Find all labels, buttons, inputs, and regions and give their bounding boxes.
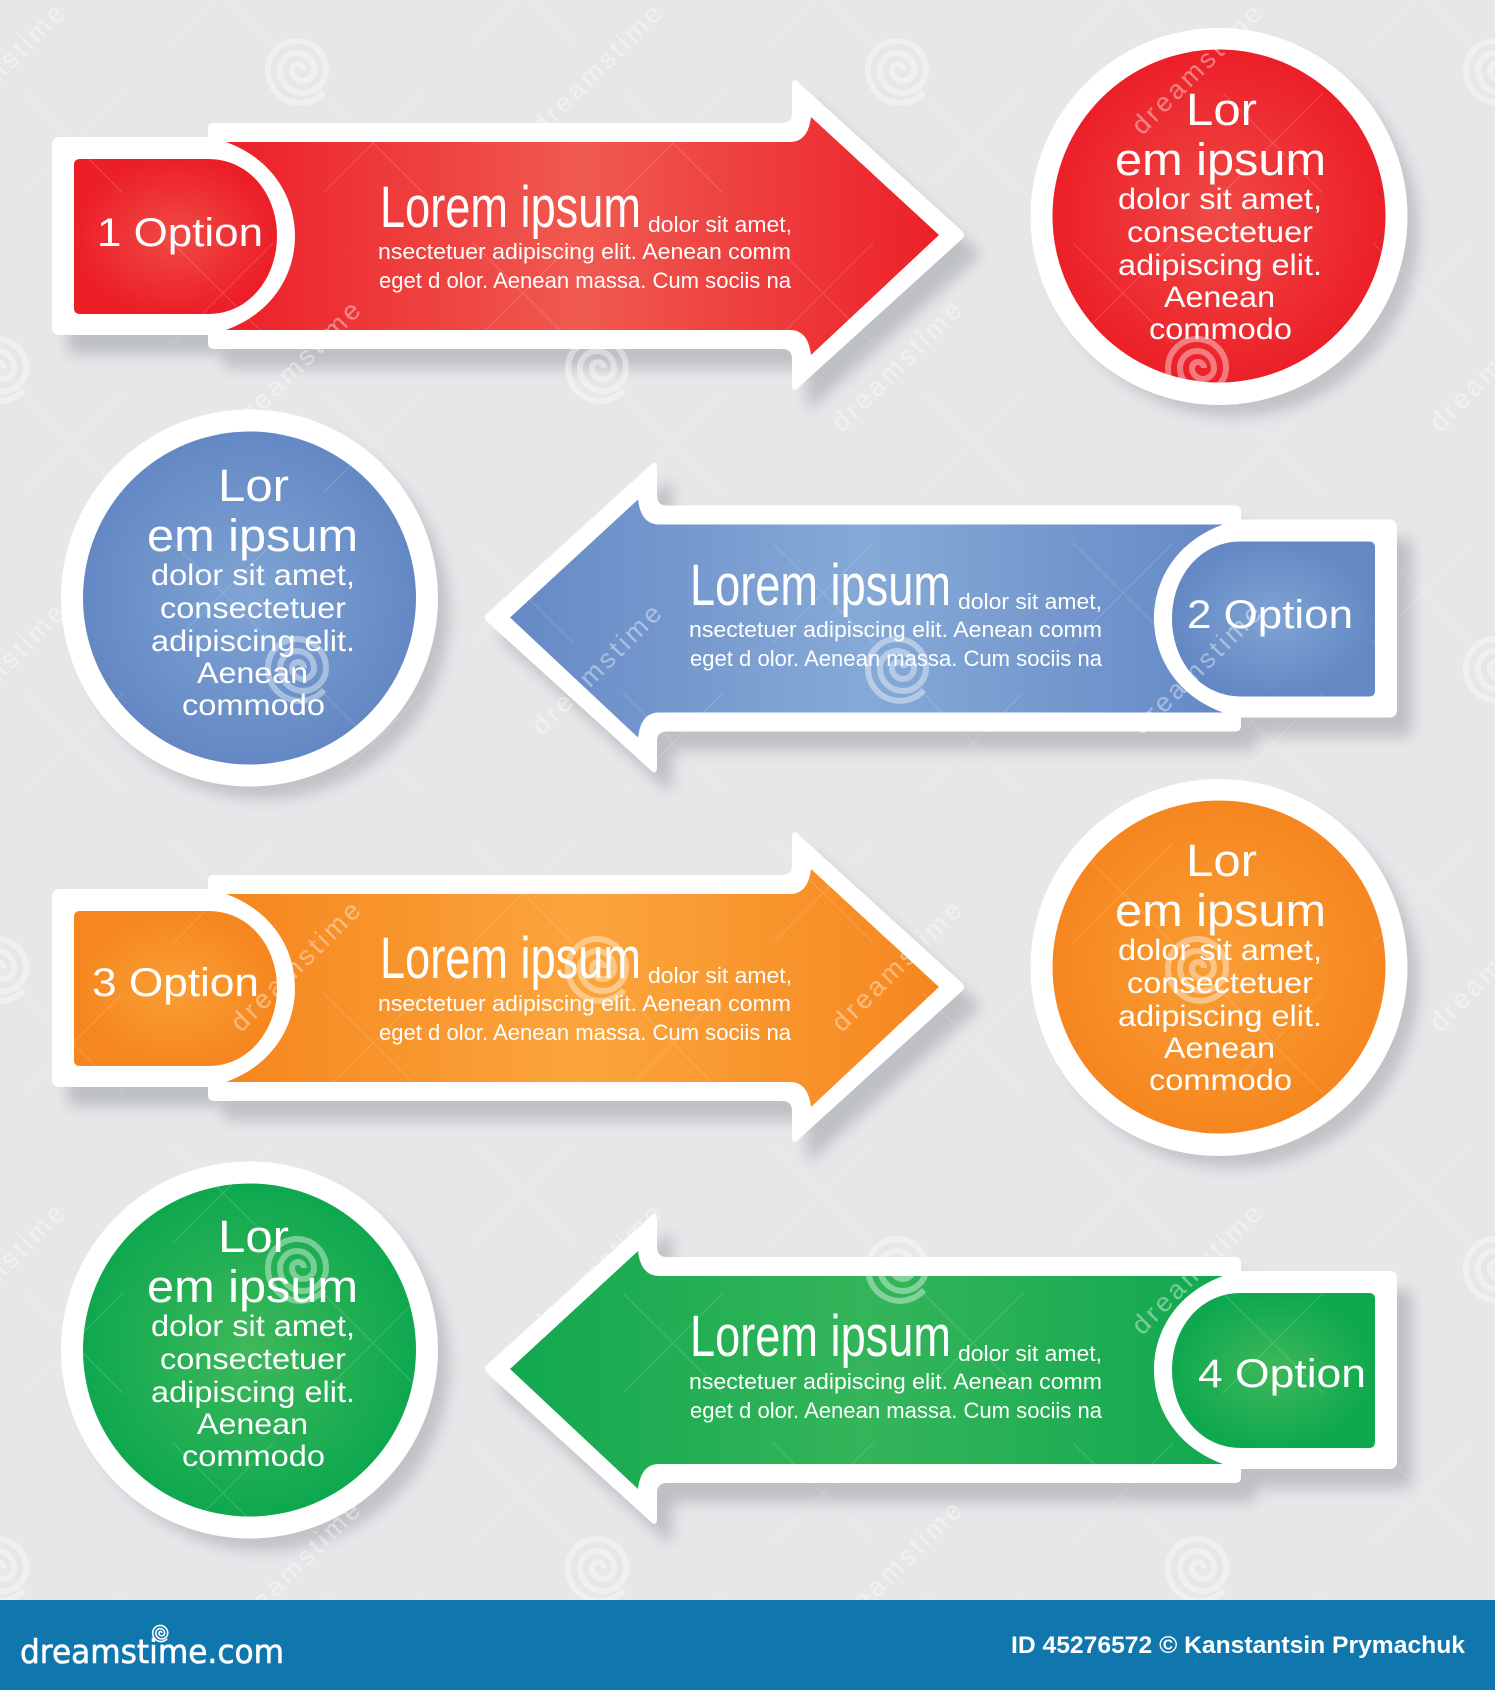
circle 1 text: Lor — [1186, 84, 1257, 135]
watermark text: dreamstime — [825, 295, 967, 437]
panel: circle 3 orange — [1030, 779, 1419, 1168]
arrow 2 text — [689, 553, 1103, 671]
circle 2 text: adipiscing elit. — [151, 625, 355, 658]
arrow 1 text: Lorem ipsum — [380, 175, 641, 240]
circle 1 text: Aenean — [1164, 281, 1275, 314]
panel: circle 1 red — [1030, 28, 1419, 417]
arrow 4 text — [689, 1304, 1103, 1423]
arrow 3 shadow — [67, 851, 979, 1161]
arrow 2 body — [510, 500, 1223, 738]
panel: arrow 2 blue — [485, 463, 1412, 791]
arrow 4 white outline — [485, 1214, 1397, 1524]
watermark text: dreamstime — [224, 895, 366, 1037]
circle 4 text: consectetuer — [160, 1343, 346, 1376]
circle 1 text: dolor sit amet, — [1118, 183, 1322, 216]
option label 4: 4 Option — [1198, 1352, 1366, 1396]
circle 1 text: commodo — [1149, 313, 1292, 346]
arrow 1 body — [226, 117, 939, 355]
option label 1: 1 Option — [97, 211, 263, 255]
watermark text: dreamstime — [825, 895, 967, 1037]
arrow 4 tab — [1172, 1293, 1375, 1448]
circle 4 text: dolor sit amet, — [151, 1310, 355, 1343]
arrow 3 text: Lorem ipsum — [380, 926, 641, 991]
arrow 4 text: Lorem ipsum — [690, 1304, 951, 1369]
circle 4 text: adipiscing elit. — [151, 1376, 355, 1409]
arrow 3 text: dolor sit amet, — [648, 963, 792, 988]
arrow 3 text: nsectetuer adipiscing elit. Aenean comm — [378, 991, 791, 1016]
arrow 3 text — [378, 926, 792, 1045]
arrow 1 text: eget d olor. Aenean massa. Cum sociis na — [379, 268, 792, 293]
arrow 2 tab — [1172, 542, 1375, 696]
circle 1 text — [1115, 84, 1326, 346]
option label 2: 2 Option — [1187, 593, 1353, 637]
circle 3 text: adipiscing elit. — [1118, 1000, 1322, 1033]
watermark text: dreamstime — [224, 295, 366, 437]
arrow 4 text: eget d olor. Aenean massa. Cum sociis na — [690, 1398, 1103, 1423]
arrow 2 text: dolor sit amet, — [958, 589, 1102, 614]
arrow 1 shadow — [67, 99, 979, 409]
arrow 1 text: dolor sit amet, — [648, 212, 792, 237]
arrow 3 text: eget d olor. Aenean massa. Cum sociis na — [379, 1020, 792, 1045]
arrow 1 text — [378, 175, 792, 293]
watermark text: dreamstime — [1125, 0, 1267, 140]
circle 2 text: em ipsum — [147, 510, 358, 561]
arrow 2 text: Lorem ipsum — [690, 553, 951, 618]
circle 4 text — [147, 1211, 358, 1473]
circle 2 text: commodo — [182, 689, 325, 722]
watermark text: dreamstime — [525, 1198, 667, 1340]
watermark text: dreamstime — [825, 1495, 967, 1637]
option label 3: 3 Option — [92, 961, 259, 1005]
arrow 2 text: eget d olor. Aenean massa. Cum sociis na — [690, 646, 1103, 671]
circle 1 text: em ipsum — [1115, 134, 1326, 185]
arrow 4 shadow — [500, 1233, 1412, 1543]
arrow 3 tab — [74, 911, 277, 1066]
watermark text: dreamstime — [1125, 598, 1267, 740]
panel: circle 4 green — [61, 1162, 450, 1551]
circle 4 text: Aenean — [197, 1408, 308, 1441]
circle 3 text: dolor sit amet, — [1118, 934, 1322, 967]
footer bar — [0, 1600, 1495, 1690]
arrow 4 text: dolor sit amet, — [958, 1341, 1102, 1366]
arrow 2 shadow — [500, 482, 1412, 791]
circle 4 text: Lor — [218, 1211, 289, 1262]
arrow 1 tab — [74, 159, 277, 314]
arrow 2 white outline — [485, 463, 1397, 772]
circle 3 text: em ipsum — [1115, 885, 1326, 936]
watermark text: dreamstime — [224, 1495, 366, 1637]
arrow 3 body — [226, 869, 939, 1107]
circle 3 text — [1115, 835, 1326, 1097]
panel: circle 2 blue — [61, 410, 450, 799]
arrow 2 text: nsectetuer adipiscing elit. Aenean comm — [689, 617, 1102, 642]
arrow 4 body — [510, 1251, 1223, 1489]
circle 2 text: consectetuer — [160, 592, 346, 625]
circle 1 text: consectetuer — [1127, 216, 1313, 249]
footer logo: dreamstime.com — [20, 1632, 284, 1671]
circle 4 text: em ipsum — [147, 1261, 358, 1312]
watermark text: dreamstime — [1125, 1198, 1267, 1340]
icon: logo spiral — [153, 1625, 168, 1642]
arrow 1 text: nsectetuer adipiscing elit. Aenean comm — [378, 239, 791, 264]
circle 3 text: Aenean — [1164, 1032, 1275, 1065]
arrow 1 white outline — [52, 80, 964, 390]
panel: arrow 4 green — [485, 1214, 1412, 1543]
circle 3 text: consectetuer — [1127, 967, 1313, 1000]
panel: arrow 3 orange — [52, 832, 979, 1161]
panel: arrow 1 red — [52, 80, 979, 409]
footer credit: ID 45276572 © Kanstantsin Prymachuk — [1011, 1632, 1466, 1659]
circle 4 text: commodo — [182, 1440, 325, 1473]
circle 2 text — [147, 460, 358, 722]
arrow 4 text: nsectetuer adipiscing elit. Aenean comm — [689, 1369, 1102, 1394]
circle 2 text: dolor sit amet, — [151, 559, 355, 592]
circle 3 text: commodo — [1149, 1064, 1292, 1097]
circle 2 text: Lor — [218, 460, 289, 511]
circle 2 text: Aenean — [197, 657, 308, 690]
arrow 3 white outline — [52, 832, 964, 1142]
circle 1 text: adipiscing elit. — [1118, 249, 1322, 282]
circle 3 text: Lor — [1186, 835, 1257, 886]
watermark text: dreamstime — [525, 0, 667, 140]
watermark text: dreamstime — [525, 598, 667, 740]
